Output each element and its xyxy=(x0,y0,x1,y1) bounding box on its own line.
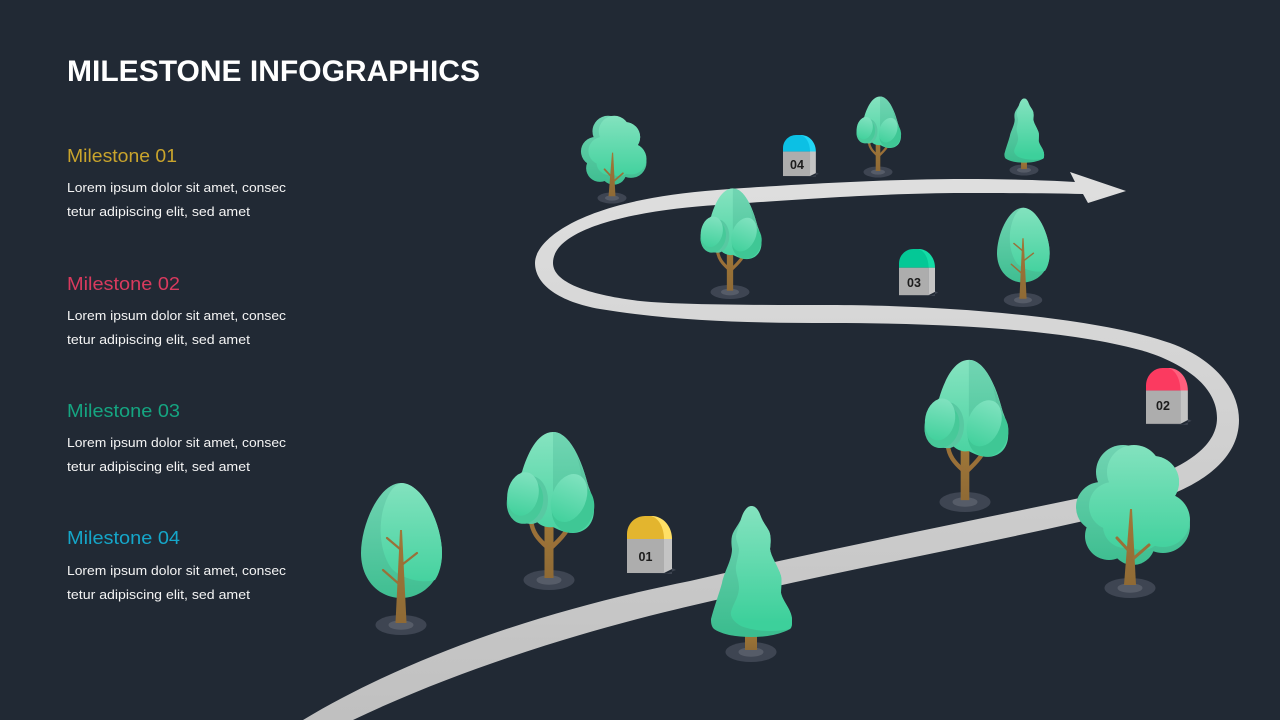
tree: lobed, left xyxy=(503,432,600,590)
milestone 02 text: Lorem ipsum dolor sit amet, consec xyxy=(67,308,287,323)
milestone 01 text: tetur adipiscing elit, sed amet xyxy=(67,204,250,219)
panel: milestone list xyxy=(67,145,287,602)
milestone 02 text xyxy=(67,273,287,347)
title: MILESTONE INFOGRAPHICS xyxy=(67,55,480,88)
milestone 04 text xyxy=(67,527,287,602)
tree: egg, far left xyxy=(361,483,442,635)
tree: cloud, right xyxy=(1076,445,1190,598)
milestone 02 text: tetur adipiscing elit, sed amet xyxy=(67,332,250,347)
marker stone 04 xyxy=(781,135,819,177)
tree: lobed, top xyxy=(854,97,904,178)
tree: pine, top right xyxy=(1004,98,1044,176)
milestone 01 text: Lorem ipsum dolor sit amet, consec xyxy=(67,180,287,195)
marker stone 01 xyxy=(624,516,676,574)
marker stone 02 xyxy=(1143,368,1192,425)
milestone 04 text: tetur adipiscing elit, sed amet xyxy=(67,587,250,602)
tree: egg, middle right xyxy=(997,208,1050,307)
milestone 04 text: Lorem ipsum dolor sit amet, consec xyxy=(67,563,287,578)
marker stone 03: 03 xyxy=(907,276,921,290)
milestone 04 text: Milestone 04 xyxy=(67,527,180,548)
milestone 03 text: Milestone 03 xyxy=(67,400,180,421)
winding road with arrow xyxy=(303,172,1239,720)
milestone 03 text: tetur adipiscing elit, sed amet xyxy=(67,459,250,474)
milestone 01 text xyxy=(67,145,287,219)
marker stone 04: 04 xyxy=(790,158,804,172)
tree: lobed, middle xyxy=(698,188,766,299)
tree: cloud, top left xyxy=(581,116,646,204)
milestone 02 text: Milestone 02 xyxy=(67,273,180,294)
tree: pine, foreground xyxy=(711,506,792,662)
marker stone 03 xyxy=(897,249,938,296)
marker stone 02: 02 xyxy=(1156,399,1170,413)
milestone 03 text xyxy=(67,400,287,474)
marker stone 01: 01 xyxy=(639,550,652,564)
milestone 01 text: Milestone 01 xyxy=(67,145,177,166)
tree: lobed, centre right xyxy=(920,360,1014,512)
milestone 03 text: Lorem ipsum dolor sit amet, consec xyxy=(67,435,287,450)
